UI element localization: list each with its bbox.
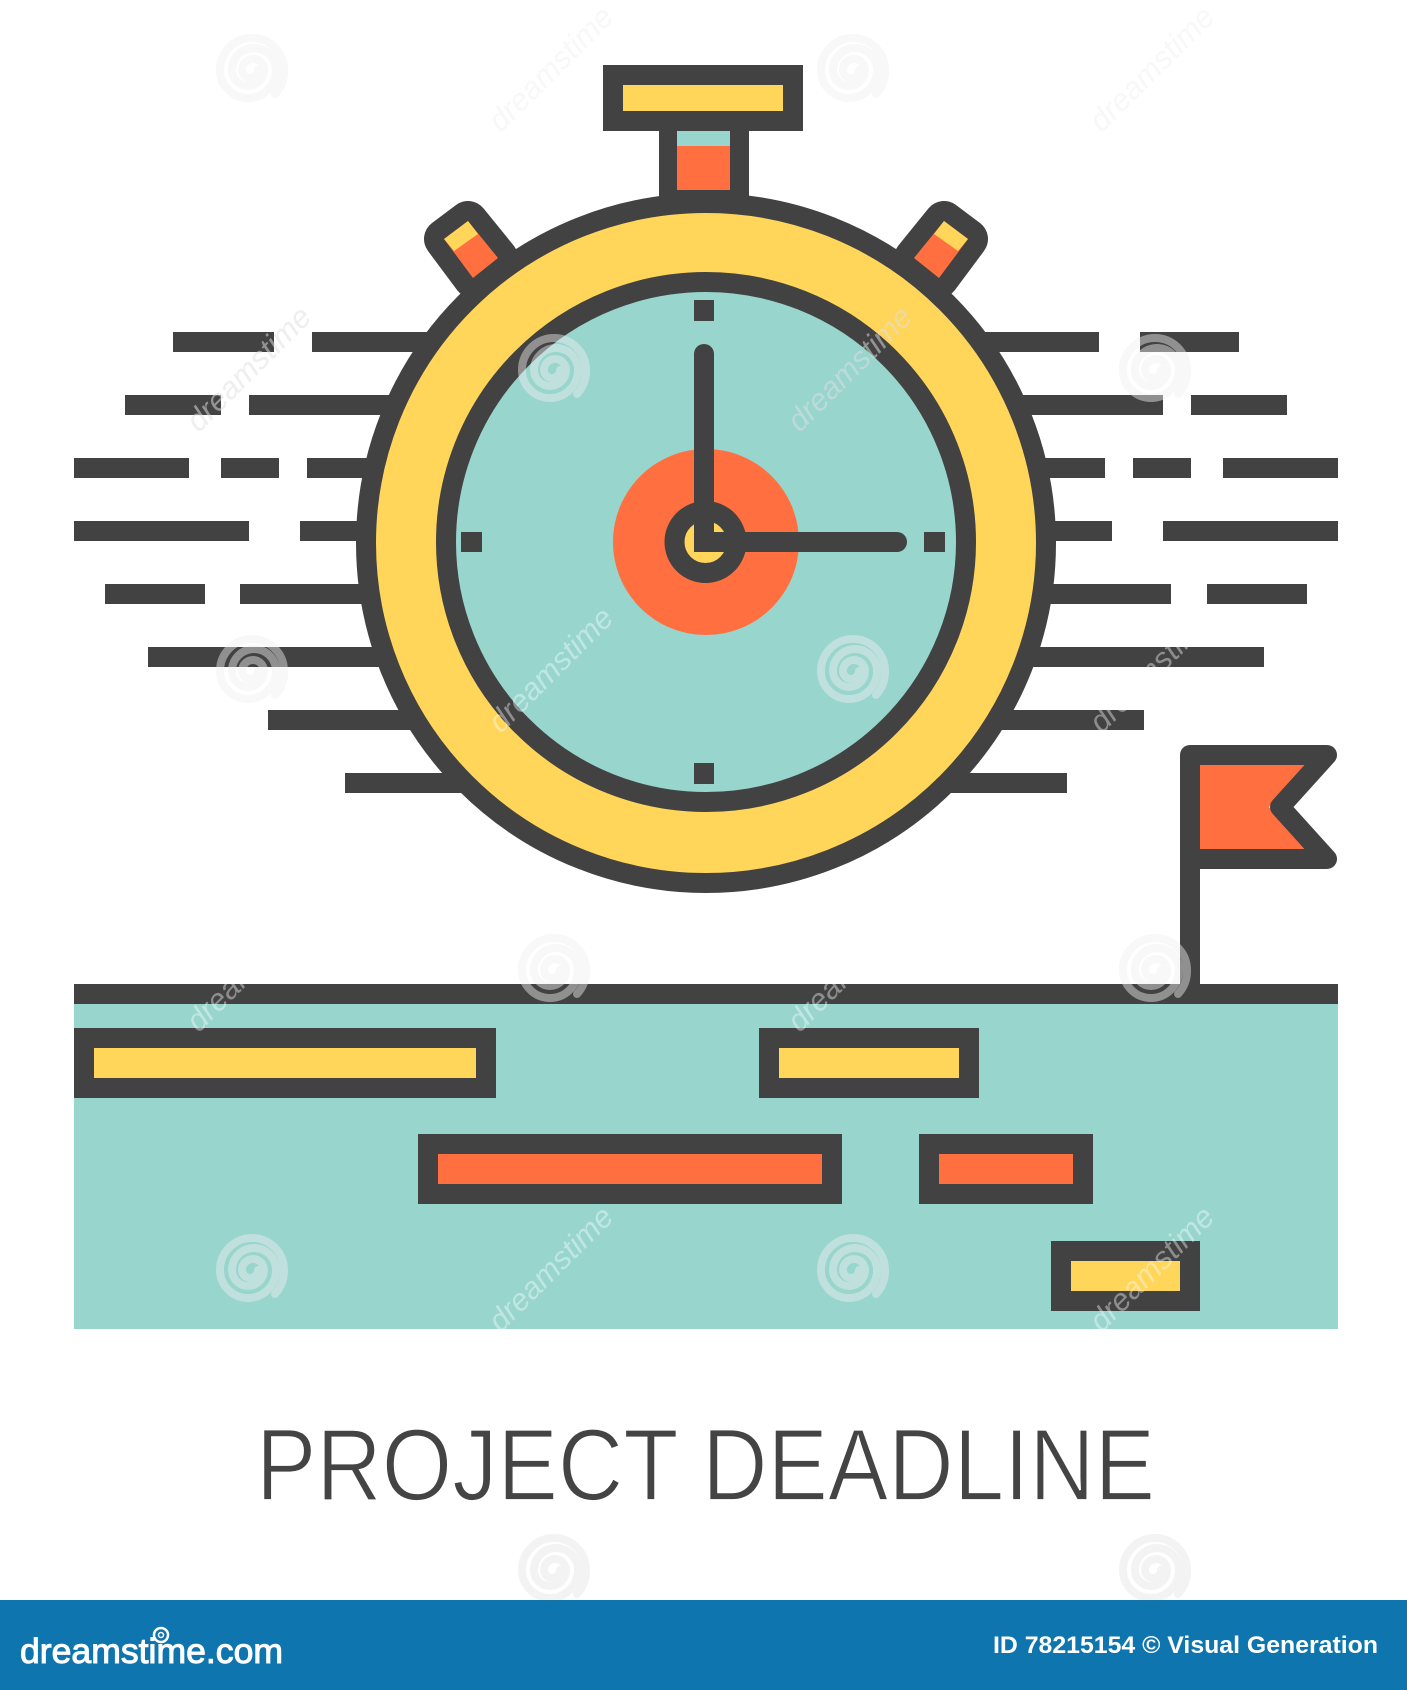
- left side button: [444, 221, 498, 278]
- watermark wordmarks: dreamstime: [1082, 600, 1221, 739]
- crown stem: [659, 131, 749, 211]
- watermark spirals: [220, 38, 1187, 1598]
- task bar 5: [1061, 1251, 1190, 1301]
- watermark wordmarks: dreamstime: [481, 0, 620, 138]
- footer logo: dreamstime.com: [20, 1632, 283, 1671]
- task bar 2: [769, 1038, 969, 1088]
- right side button: [914, 221, 968, 278]
- watermark wordmarks: dreamstime: [481, 1199, 620, 1338]
- watermark wordmarks: dreamstime: [1082, 0, 1221, 138]
- hub: [674, 511, 736, 573]
- watermark wordmarks: dreamstime: [780, 299, 919, 438]
- speed lines: [74, 332, 1338, 793]
- watermark wordmarks: dreamstime: [179, 299, 318, 438]
- watermark wordmarks: [179, 0, 1221, 1338]
- clock dial: [446, 282, 966, 802]
- footer band: [0, 1600, 1407, 1690]
- watermark wordmarks: dreamstime: [1082, 0, 1221, 138]
- watermark wordmarks: dreamstime: [780, 299, 919, 438]
- title: PROJECT DEADLINE: [256, 1408, 1155, 1522]
- image credit: ID 78215154 © Visual Generation: [993, 1632, 1378, 1659]
- crown cap: [613, 75, 793, 121]
- watermark wordmarks: dreamstime: [481, 600, 620, 739]
- watermark wordmarks: dreamstime: [179, 299, 318, 438]
- hour marks: [461, 300, 945, 784]
- outer case: [366, 203, 1046, 883]
- task bar 1: [84, 1038, 486, 1088]
- watermark wordmarks: dreamstime: [1082, 1199, 1221, 1338]
- orange centre disc: [613, 449, 799, 635]
- watermark wordmarks: dreamstime: [780, 899, 919, 1038]
- watermark wordmarks: dreamstime: [179, 899, 318, 1038]
- clock hands: [704, 354, 897, 542]
- watermark wordmarks: dreamstime: [481, 0, 620, 138]
- timeline ground: [74, 984, 1338, 1329]
- task bar 3: [428, 1144, 832, 1194]
- task bar 4: [929, 1144, 1083, 1194]
- stopwatch: [366, 75, 1046, 883]
- finish flag: [1190, 755, 1327, 990]
